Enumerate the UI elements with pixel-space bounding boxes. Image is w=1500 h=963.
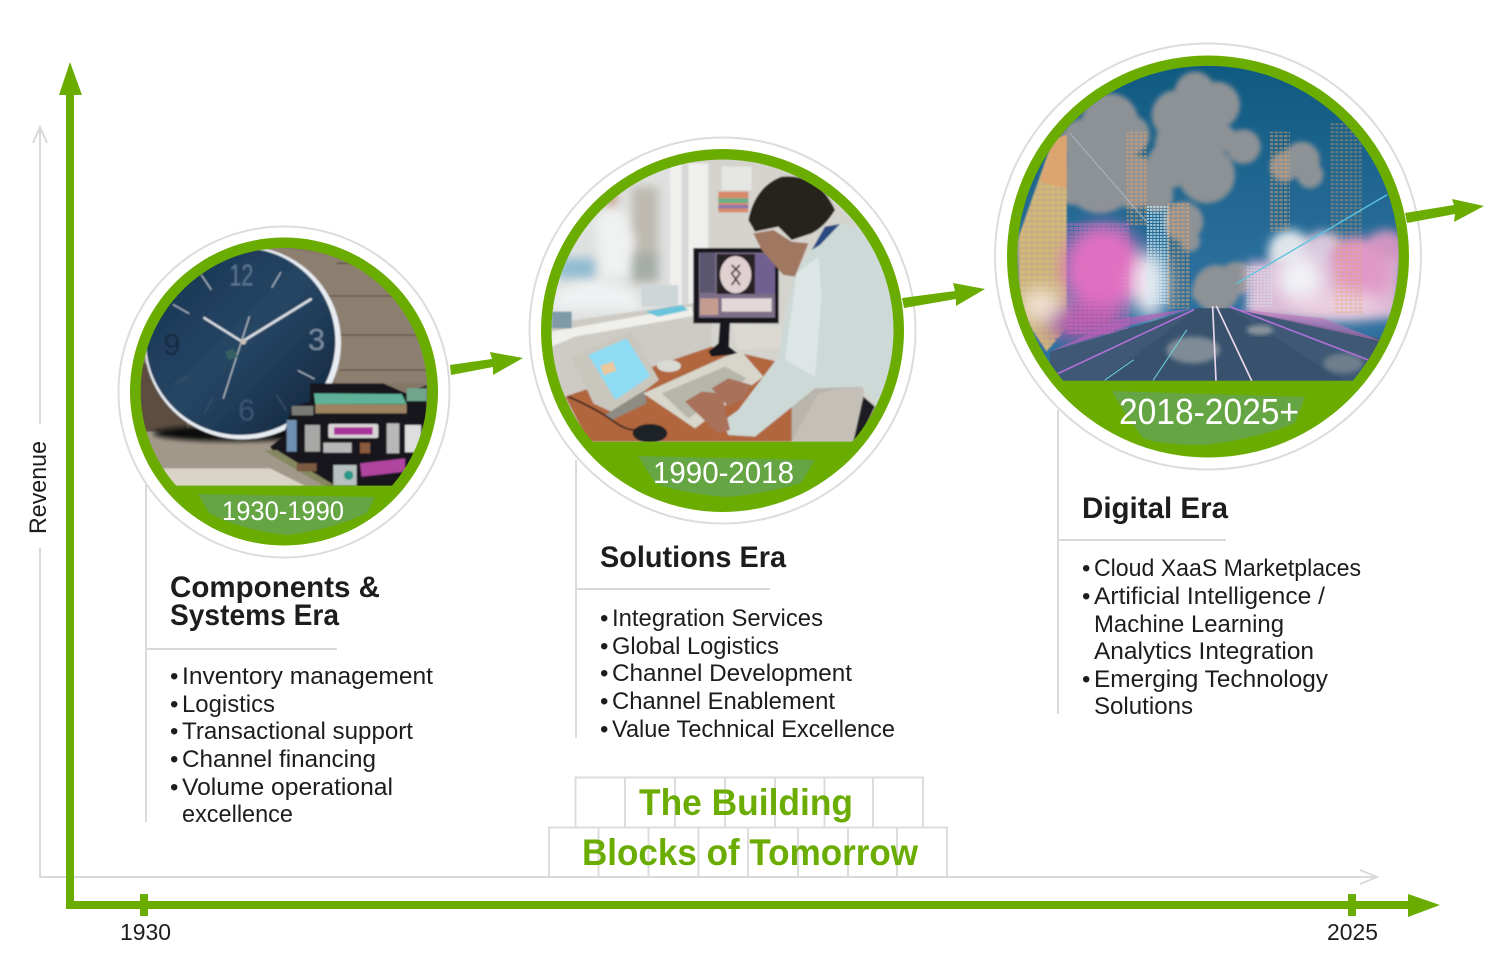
slogan: The Building Blocks of Tomorrow: [582, 782, 918, 873]
heading: Systems Era: [170, 599, 339, 632]
bullet list: [1082, 555, 1361, 720]
bullet list: Value Technical Excellence: [612, 716, 895, 743]
bullet list: •: [170, 746, 178, 773]
bullet list: Emerging Technology: [1094, 666, 1328, 693]
photo: clock and motherboards: [140, 248, 428, 486]
connector lines: [576, 460, 770, 738]
year banner: [1112, 391, 1305, 445]
bullet list: •: [600, 660, 608, 687]
arrow: second to third era: [902, 283, 985, 308]
heading: Components &: [170, 571, 380, 604]
bullet list: excellence: [182, 801, 293, 828]
connector lines: [1058, 410, 1226, 714]
panel: Components & Systems Era: [118, 226, 450, 828]
panel: Digital Era: [995, 44, 1421, 720]
axis label: Revenue: Revenue: [25, 441, 52, 534]
bullet list: •: [1082, 666, 1090, 693]
arrow: onward from third era: [1405, 199, 1484, 223]
photo: clock and motherboards: 12: [229, 258, 253, 292]
arrow: first to second era: [450, 352, 523, 375]
photo: technician at workstation: [548, 157, 898, 443]
bullet list: Channel financing: [182, 746, 376, 773]
photo: clock and motherboards: 3: [308, 323, 325, 357]
bullet list: •: [600, 716, 608, 743]
bullet list: •: [1082, 555, 1090, 582]
bullet list: Analytics Integration: [1094, 638, 1314, 665]
era medallion: 1930-1990: [118, 226, 450, 558]
bullet list: •: [170, 691, 178, 718]
year label: 1930-1990: [222, 496, 344, 526]
connector lines: [146, 485, 337, 822]
bullet list: Artificial Intelligence /: [1094, 583, 1325, 610]
bullet list: Inventory management: [182, 663, 433, 690]
slogan: The Building Blocks of Tomorrow: The Building: [639, 782, 853, 823]
bullet list: Channel Enablement: [612, 688, 835, 715]
bullet list: Global Logistics: [612, 633, 779, 660]
photo: digital city in clouds: [1013, 62, 1408, 382]
bullet list: •: [600, 633, 608, 660]
heading: Solutions Era: [600, 541, 786, 574]
bullet list: •: [170, 774, 178, 801]
era medallion: 2018-2025+: [995, 44, 1421, 470]
bullet list: Cloud XaaS Marketplaces: [1094, 555, 1361, 582]
bullet list: Integration Services: [612, 605, 823, 632]
bullet list: •: [170, 718, 178, 745]
year banner: [198, 494, 375, 535]
panel: Solutions Era: [530, 138, 916, 743]
axis label: 1930: 1930: [120, 919, 171, 945]
bullet list: Machine Learning: [1094, 611, 1284, 638]
era medallion: 1990-2018: [530, 138, 916, 524]
bullet list: Volume operational: [182, 774, 393, 801]
bullet list: Solutions: [1094, 693, 1193, 720]
building blocks wall: [549, 777, 947, 877]
bullet list: •: [1082, 583, 1090, 610]
year label: 1990-2018: [653, 455, 794, 490]
bullet list: [600, 605, 895, 743]
bullet list: [170, 663, 433, 828]
bullet list: •: [600, 605, 608, 632]
bullet list: Channel Development: [612, 660, 852, 687]
heading: [170, 571, 380, 632]
bullet list: •: [600, 688, 608, 715]
photo: clock and motherboards: 9: [163, 328, 180, 362]
slogan: The Building Blocks of Tomorrow: Blocks of Tomorrow: [582, 832, 918, 873]
photo: clock and motherboards: 6: [238, 394, 255, 428]
heading: Digital Era: [1082, 492, 1228, 525]
bullet list: •: [170, 663, 178, 690]
year banner: [638, 456, 815, 497]
bullet list: Logistics: [182, 691, 275, 718]
axis label: 2025: 2025: [1327, 919, 1378, 945]
year label: 2018-2025+: [1119, 391, 1299, 432]
grey reference axes: [33, 127, 1377, 884]
bullet list: Transactional support: [182, 718, 413, 745]
